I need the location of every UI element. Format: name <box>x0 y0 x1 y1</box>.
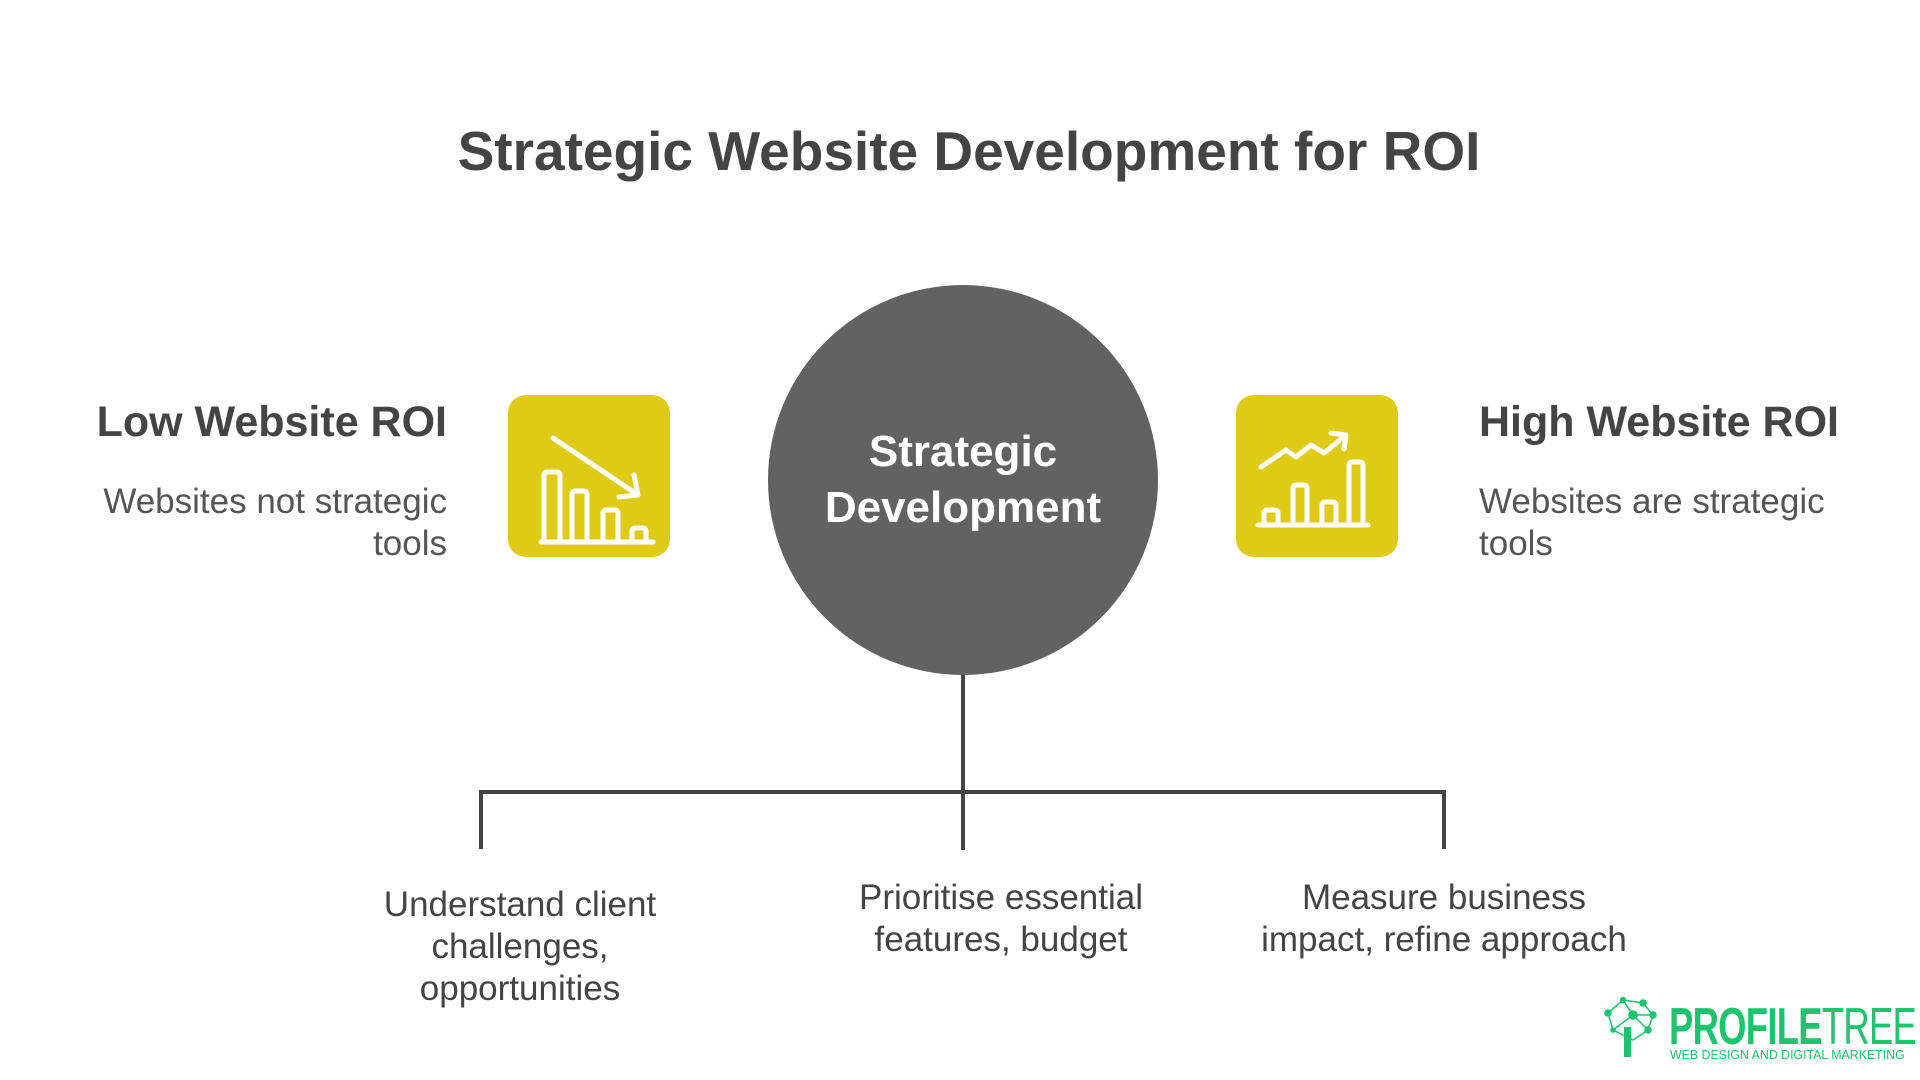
step 1 text <box>384 885 656 1008</box>
step 2 text: features, budget <box>875 920 1127 959</box>
logo <box>1604 996 1916 1062</box>
text: low ROI: tools <box>373 524 447 563</box>
logo tagline: WEB DESIGN AND DIGITAL MARKETING <box>1670 1047 1905 1062</box>
step 3 text: Measure business <box>1302 878 1586 917</box>
text: low ROI <box>103 482 447 563</box>
icon: declining bar chart <box>508 395 670 557</box>
title: Strategic Website Development for ROI <box>458 120 1480 182</box>
text: high ROI <box>1479 482 1825 563</box>
step 1 text: Understand client <box>384 885 656 924</box>
step 1 text: opportunities <box>420 969 620 1008</box>
step 2 text: Prioritise essential <box>859 878 1143 917</box>
logo text: PROFILETREE <box>1669 998 1916 1056</box>
text: high ROI: tools <box>1479 524 1553 563</box>
heading: high ROI: High Website ROI <box>1479 398 1839 446</box>
heading: low ROI: Low Website ROI <box>97 398 447 446</box>
logo icon <box>1604 996 1657 1057</box>
step 3 text: impact, refine approach <box>1261 920 1627 959</box>
text: high ROI: Websites are strategic <box>1479 482 1825 521</box>
step 2 text <box>859 878 1143 959</box>
icon: rising bar chart <box>1236 395 1398 557</box>
central circle: Strategic <box>869 427 1057 476</box>
step 1 text: challenges, <box>431 927 609 966</box>
step 3 text <box>1261 878 1627 959</box>
central circle: Development <box>825 483 1101 532</box>
text: low ROI: Websites not strategic <box>103 482 447 521</box>
central circle <box>768 285 1158 675</box>
